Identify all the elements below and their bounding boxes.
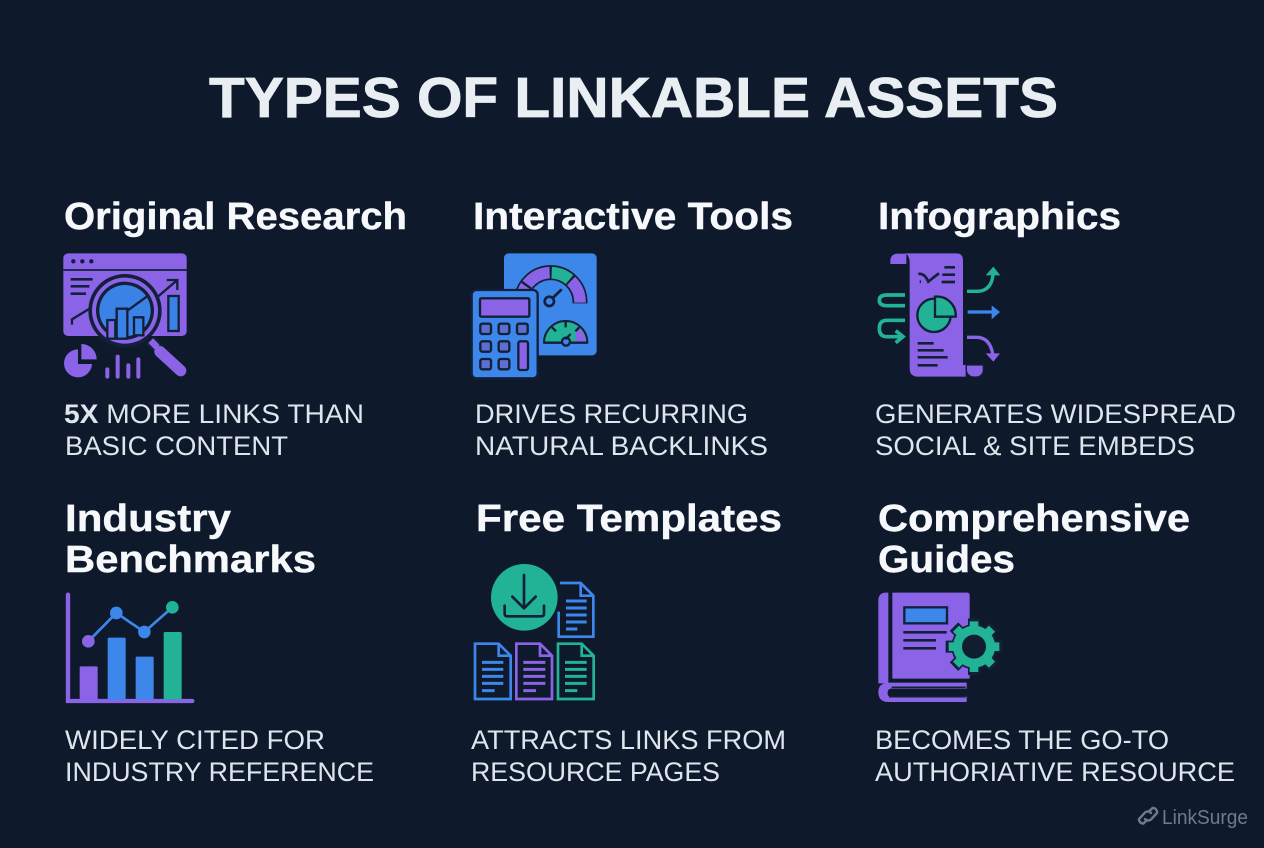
description: interactive tools	[475, 399, 768, 461]
icon: book with gear	[878, 593, 1002, 702]
icon: calculator and gauges	[472, 253, 597, 378]
description: comprehensive guides	[875, 725, 1235, 787]
description: free templates: RESOURCE PAGES	[471, 757, 720, 787]
panel: free templates	[471, 498, 786, 787]
description: free templates: ATTRACTS LINKS FROM	[471, 725, 786, 755]
panel: original research	[63, 196, 407, 461]
title: TYPES OF LINKABLE ASSETS	[209, 66, 1058, 130]
description: original research: 5X MORE LINKS THAN	[64, 399, 364, 429]
description: infographics: SOCIAL & SITE EMBEDS	[875, 431, 1195, 461]
description: free templates	[471, 725, 786, 787]
description: infographics	[875, 399, 1236, 461]
heading: infographics: Infographics	[878, 196, 1121, 238]
heading: comprehensive guides: Guides	[878, 539, 1015, 581]
icon: download and documents	[475, 564, 594, 699]
heading: comprehensive guides: Comprehensive	[878, 498, 1190, 540]
gear outline	[946, 618, 1002, 675]
icon: scroll with pie chart and arrows	[879, 253, 1000, 377]
description: industry benchmarks	[65, 725, 374, 787]
heading: interactive tools: Interactive Tools	[473, 196, 793, 238]
watermark: LinkSurge: LinkSurge	[1162, 807, 1248, 829]
panel: industry benchmarks	[65, 498, 374, 787]
heading: free templates: Free Templates	[476, 498, 782, 540]
description: comprehensive guides: AUTHORIATIVE RESOURCE	[875, 757, 1235, 787]
panel: interactive tools	[472, 196, 793, 461]
description: industry benchmarks: WIDELY CITED FOR	[65, 725, 325, 755]
panel: comprehensive guides	[875, 498, 1235, 787]
heading: industry benchmarks: Benchmarks	[65, 539, 316, 581]
description: interactive tools: DRIVES RECURRING	[475, 399, 748, 429]
description: interactive tools: NATURAL BACKLINKS	[475, 431, 768, 461]
panel: infographics	[875, 196, 1236, 461]
icon: chain link	[1139, 808, 1157, 824]
description: industry benchmarks: INDUSTRY REFERENCE	[65, 757, 374, 787]
heading: comprehensive guides	[878, 498, 1190, 581]
heading: original research: Original Research	[64, 196, 407, 238]
gear body	[949, 621, 999, 672]
description: comprehensive guides: BECOMES THE GO-TO	[875, 725, 1169, 755]
description: original research	[64, 399, 364, 461]
description: original research: BASIC CONTENT	[65, 431, 288, 461]
icon: research window and magnifier	[63, 253, 187, 377]
description: infographics: GENERATES WIDESPREAD	[875, 399, 1236, 429]
heading: industry benchmarks: Industry	[65, 498, 231, 540]
icon: bar and line chart	[68, 595, 192, 701]
heading: industry benchmarks	[65, 498, 316, 581]
